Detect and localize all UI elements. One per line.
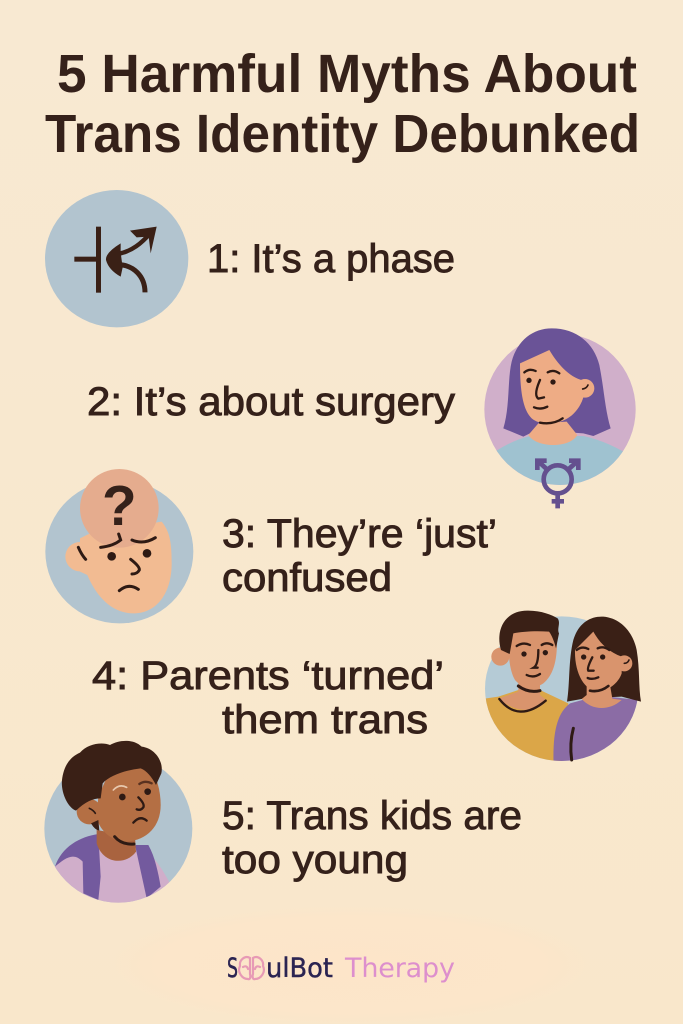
myth 3 text: 3: They’re ‘just’ — [222, 512, 497, 556]
icon: two parents — [482, 611, 641, 767]
myth 4 text: 4: Parents ‘turned’ — [92, 654, 444, 698]
title: 5 Harmful Myths About — [57, 44, 637, 104]
icon: confused face with question mark: ? — [102, 475, 137, 538]
icon: diverging path arrows — [45, 190, 188, 327]
footer logo: SoulBot Therapy: Therapy — [344, 953, 455, 984]
myth 5 text: too young — [222, 838, 408, 882]
icon: child with backpack — [44, 741, 192, 907]
icon: person with transgender symbol — [483, 328, 637, 508]
myth 3 text — [222, 512, 497, 600]
myth 5 text — [222, 794, 522, 882]
title — [45, 44, 640, 164]
icon: confused face with question mark — [45, 469, 193, 623]
footer logo: SoulBot Therapy: S — [227, 953, 238, 984]
icon: curly hair — [62, 741, 162, 811]
myth 3 text: confused — [222, 556, 392, 600]
icon: brain logo — [239, 957, 264, 979]
myth 4 text — [92, 654, 444, 742]
footer logo: SoulBot Therapy: ulBot — [266, 953, 333, 984]
myth 2 text: 2: It’s about surgery — [87, 380, 455, 424]
myth 4 text: them trans — [222, 698, 428, 742]
title: Trans Identity Debunked — [45, 104, 640, 164]
myth 5 text: 5: Trans kids are — [222, 794, 522, 838]
footer logo: SoulBot Therapy — [227, 953, 455, 984]
myth 1 text: 1: It’s a phase — [207, 237, 455, 281]
